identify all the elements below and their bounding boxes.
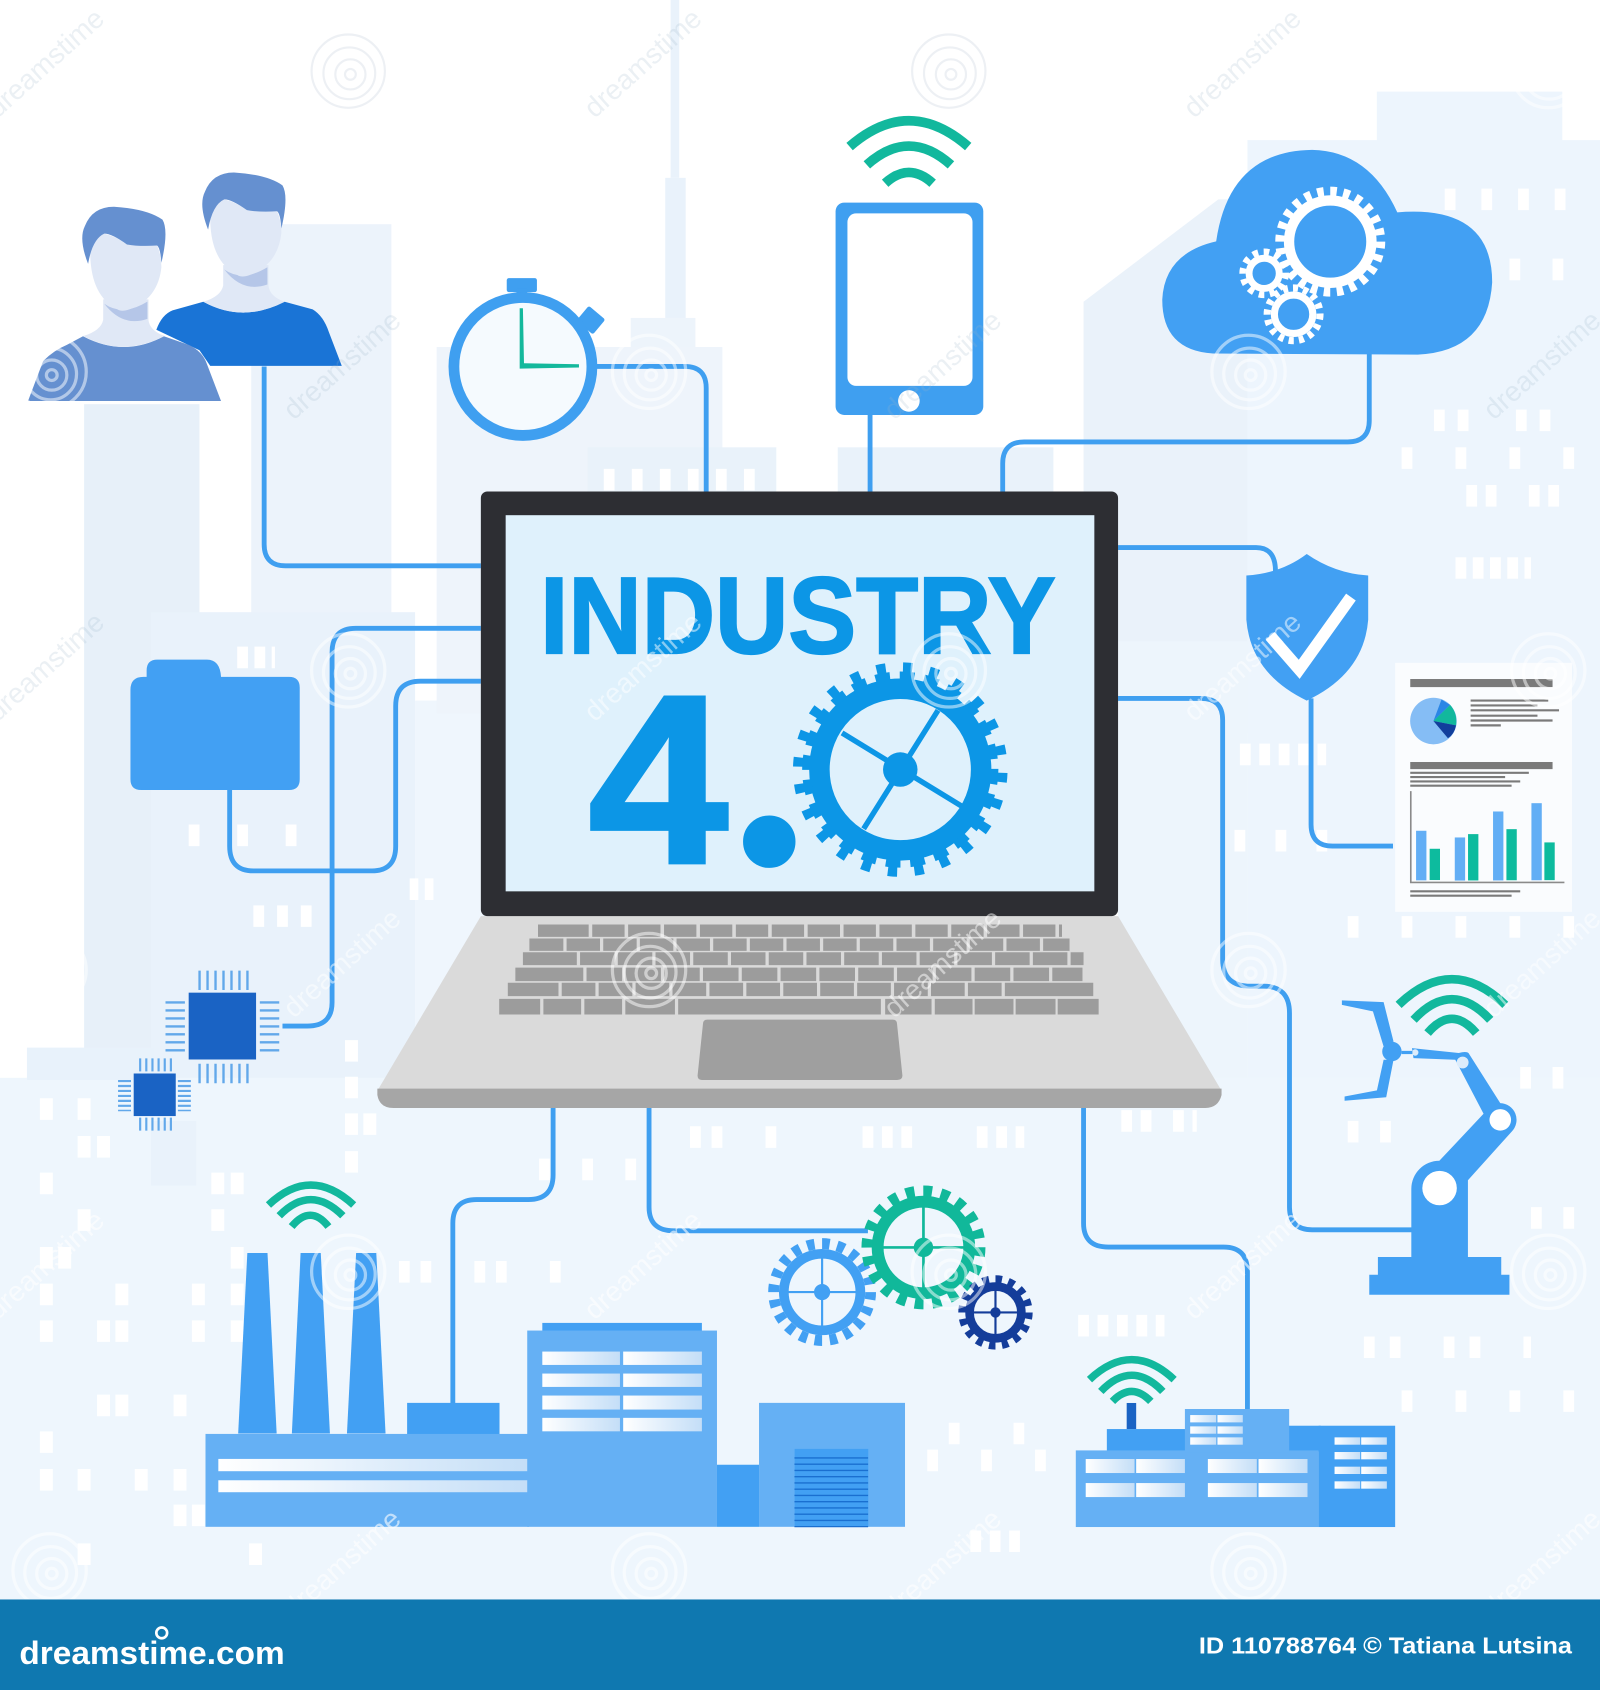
icon: smartphone with wifi (836, 121, 983, 415)
icon: factory (205, 1185, 905, 1527)
factory vent (795, 1449, 868, 1527)
watermark text: dreamstime (878, 1503, 1007, 1624)
factory buildings (205, 1331, 905, 1527)
footer logo: dreamstime.com (19, 1635, 285, 1671)
icon: two people (28, 172, 342, 401)
icon: blue gear (774, 1244, 871, 1341)
icon: plant wifi signal (1089, 1360, 1174, 1401)
title: 4.: 4 (589, 645, 728, 913)
icon: robot wifi signal (1399, 979, 1505, 1033)
laptop base (377, 916, 1222, 1108)
watermark text: dreamstime (878, 304, 1007, 425)
icon: teal gear (867, 1191, 980, 1304)
icon: stopwatch (454, 278, 605, 435)
factory chimneys (238, 1253, 759, 1527)
laptop screen bezel (481, 491, 1118, 916)
connector lines (230, 354, 1415, 1412)
footer logo spiral (156, 1627, 167, 1638)
icon: phone wifi signal (850, 121, 968, 183)
icon: back person (156, 172, 342, 366)
icon: cloud large gear (1280, 192, 1380, 292)
title: 4.: . (729, 575, 810, 933)
watermark text: dreamstime (1177, 3, 1307, 123)
icon: front person (28, 207, 221, 401)
watermark text: dreamstime (1177, 1204, 1307, 1325)
watermark text: dreamstime (1177, 606, 1307, 727)
factory windows (218, 1352, 702, 1492)
watermark text: dreamstime (277, 1503, 407, 1624)
icon: cloud small gear left (1243, 252, 1286, 295)
icon: factory wifi signal (268, 1185, 354, 1227)
icon: navy gear (962, 1279, 1029, 1346)
footer credit: ID 110788764 © Tatiana Lutsina (1199, 1632, 1573, 1658)
report text lines (1410, 701, 1559, 896)
watermark text: dreamstime (878, 902, 1007, 1023)
icon: small chip (125, 1065, 184, 1124)
icon: large chip (175, 980, 270, 1073)
watermark text: dreamstime (578, 1204, 707, 1325)
robot base (1369, 1048, 1517, 1295)
background building windows (40, 199, 1585, 1565)
keyboard (499, 931, 1102, 1007)
plant windows (1086, 1415, 1387, 1497)
icon: cloud with gears (1162, 150, 1492, 355)
footer bar (0, 1599, 1600, 1690)
touchpad (698, 1020, 902, 1080)
bar chart (1411, 791, 1564, 882)
watermark text: dreamstime (277, 304, 407, 425)
icon: folder (130, 660, 300, 790)
robot gripper (1342, 1000, 1412, 1101)
pie chart (1410, 698, 1457, 744)
icon: microchips (125, 980, 270, 1124)
icon: three cooperating gears (774, 1191, 1029, 1346)
watermark text: dreamstime (578, 3, 707, 123)
robot joints (1412, 1049, 1511, 1205)
icon: small plant (1076, 1360, 1395, 1527)
laptop screen (506, 515, 1094, 891)
icon: cloud small gear bottom (1267, 288, 1320, 341)
icon: large gear forming the zero (798, 668, 1002, 871)
icon: robot arm (1342, 979, 1517, 1295)
watermark text: dreamstime (578, 606, 707, 727)
watermark text: dreamstime (277, 902, 407, 1023)
title: INDUSTRY: INDUSTRY (540, 555, 1056, 677)
title: 4. (589, 575, 810, 933)
icon: security shield (1246, 554, 1368, 701)
laptop (377, 491, 1222, 1108)
panel: report document (1395, 663, 1572, 912)
